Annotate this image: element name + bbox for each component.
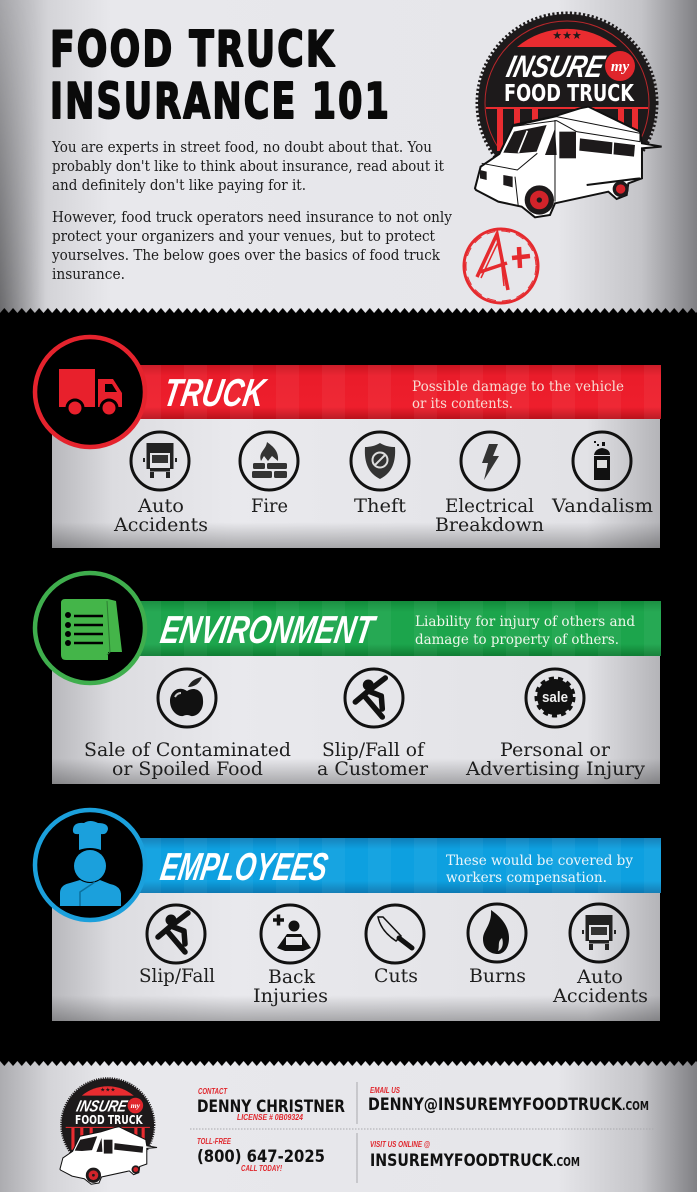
item: slip and fall of a customer: Slip/Fall of [322, 739, 426, 761]
contact block: LICENSE # 0B09324 [237, 1113, 303, 1122]
intro text: You are experts in street food, no doubt about that. You [51, 140, 432, 156]
website block: VISIT US ONLINE @ [370, 1140, 430, 1149]
title: INSURANCE 101 [50, 73, 391, 130]
contact block: CONTACT [198, 1087, 228, 1096]
intro text: However, food truck operators need insurance to not only [52, 210, 453, 226]
intro text: and definitely don't like paying for it. [52, 178, 306, 194]
intro text: insurance. [52, 267, 125, 283]
item: cuts [366, 905, 424, 987]
panel body [52, 656, 660, 784]
footer dividers [190, 1082, 655, 1183]
email block [368, 1086, 649, 1115]
item: auto accidents [552, 904, 648, 1007]
intro text: probably don't like to think about insurance, read about it [52, 159, 444, 175]
heading: EMPLOYEES [157, 845, 331, 889]
phone block: CALL TODAY! [241, 1164, 282, 1173]
panel: truck [35, 337, 661, 548]
email block: EMAIL US [370, 1086, 401, 1095]
contact block [197, 1087, 345, 1122]
icon: truck badge [35, 337, 145, 447]
panel header [100, 601, 661, 656]
description: Possible damage to the vehicle [412, 379, 624, 395]
black band [0, 305, 697, 1069]
footer logo: ★★★ [100, 1087, 115, 1094]
item: auto accidents: Auto [137, 495, 184, 517]
item: personal or advertising injury: Personal or [500, 739, 611, 761]
intro text: yourselves. The below goes over the basics of food truck [51, 248, 440, 264]
website block: .COM [553, 1155, 580, 1169]
item: personal or advertising injury: Advertising Injury [465, 758, 645, 780]
icon: chef badge [35, 810, 145, 920]
contact block: DENNY CHRISTNER [197, 1097, 345, 1117]
phone block: TOLL-FREE [197, 1137, 231, 1146]
description: damage to property of others. [415, 632, 619, 648]
logo: Insure my Food Truck: my [611, 59, 630, 75]
item: auto accidents: Auto [576, 966, 623, 988]
item: slip and fall of a customer [317, 669, 429, 780]
icon: A+ stamp [464, 229, 538, 303]
description [412, 379, 624, 412]
item: vandalism: Vandalism [551, 495, 653, 517]
item: fire: Fire [251, 495, 288, 517]
item: back injuries [253, 905, 328, 1007]
item: auto accidents: Accidents [113, 514, 208, 536]
email block: DENNY@INSUREMYFOODTRUCK [368, 1095, 623, 1115]
website block: INSUREMYFOODTRUCK [370, 1151, 554, 1171]
title [50, 21, 391, 130]
item: slip and fall: Slip/Fall [139, 965, 215, 987]
footer logo: INSURE [75, 1097, 130, 1115]
item: theft [351, 432, 409, 517]
footer logo: my [131, 1101, 141, 1110]
description [415, 614, 635, 648]
email block: .COM [622, 1099, 649, 1113]
logo: Insure my Food Truck [475, 13, 662, 217]
item: fire [240, 432, 298, 517]
item: slip and fall [139, 905, 215, 987]
item: electrical breakdown: Electrical [445, 495, 534, 517]
item: personal or advertising injury: sale [542, 689, 568, 706]
description: workers compensation. [446, 870, 607, 886]
item: back injuries: Back [268, 966, 315, 988]
item: vandalism [551, 432, 653, 517]
logo: Insure my Food Truck: FOOD TRUCK [504, 81, 635, 107]
item: sale of contaminated food: or Spoiled Food [112, 758, 263, 780]
item: theft: Theft [354, 495, 406, 517]
description [446, 853, 633, 886]
website block [370, 1140, 580, 1171]
description: These would be covered by [446, 853, 633, 869]
item: sale of contaminated food: Sale of Contaminated [84, 739, 291, 761]
panel: employees [35, 810, 661, 1021]
panel body [52, 419, 660, 548]
footer logo: FOOD TRUCK [75, 1113, 143, 1127]
panel header [100, 365, 661, 419]
phone block [197, 1137, 325, 1173]
intro text: protect your organizers and your venues, but to protect [52, 229, 435, 245]
description: Liability for injury of others and [415, 614, 635, 630]
panel header [100, 838, 661, 893]
item: slip and fall of a customer: a Customer [317, 758, 429, 780]
icon: checklist badge [35, 573, 145, 683]
description: or its contents. [412, 396, 513, 412]
footer logo [60, 1078, 157, 1184]
item: back injuries: Injuries [253, 985, 328, 1007]
item: electrical breakdown: Breakdown [435, 514, 544, 536]
item: auto accidents: Accidents [552, 985, 648, 1007]
heading: TRUCK [160, 371, 270, 415]
item: electrical breakdown [435, 432, 544, 536]
item: personal or advertising injury [465, 669, 645, 780]
item: burns: Burns [469, 965, 526, 987]
intro text [51, 140, 453, 283]
title: FOOD TRUCK [50, 21, 336, 78]
phone block: (800) 647-2025 [197, 1147, 325, 1167]
item: sale of contaminated food [84, 669, 291, 780]
item: cuts: Cuts [374, 965, 418, 987]
panel body [52, 893, 660, 1021]
item: burns [468, 904, 526, 987]
logo: Insure my Food Truck: INSURE [503, 49, 609, 84]
heading: ENVIRONMENT [157, 608, 379, 652]
logo: Insure my Food Truck: ★★★ [552, 29, 582, 42]
panel: environment [35, 573, 661, 784]
item: auto accidents [113, 432, 208, 536]
